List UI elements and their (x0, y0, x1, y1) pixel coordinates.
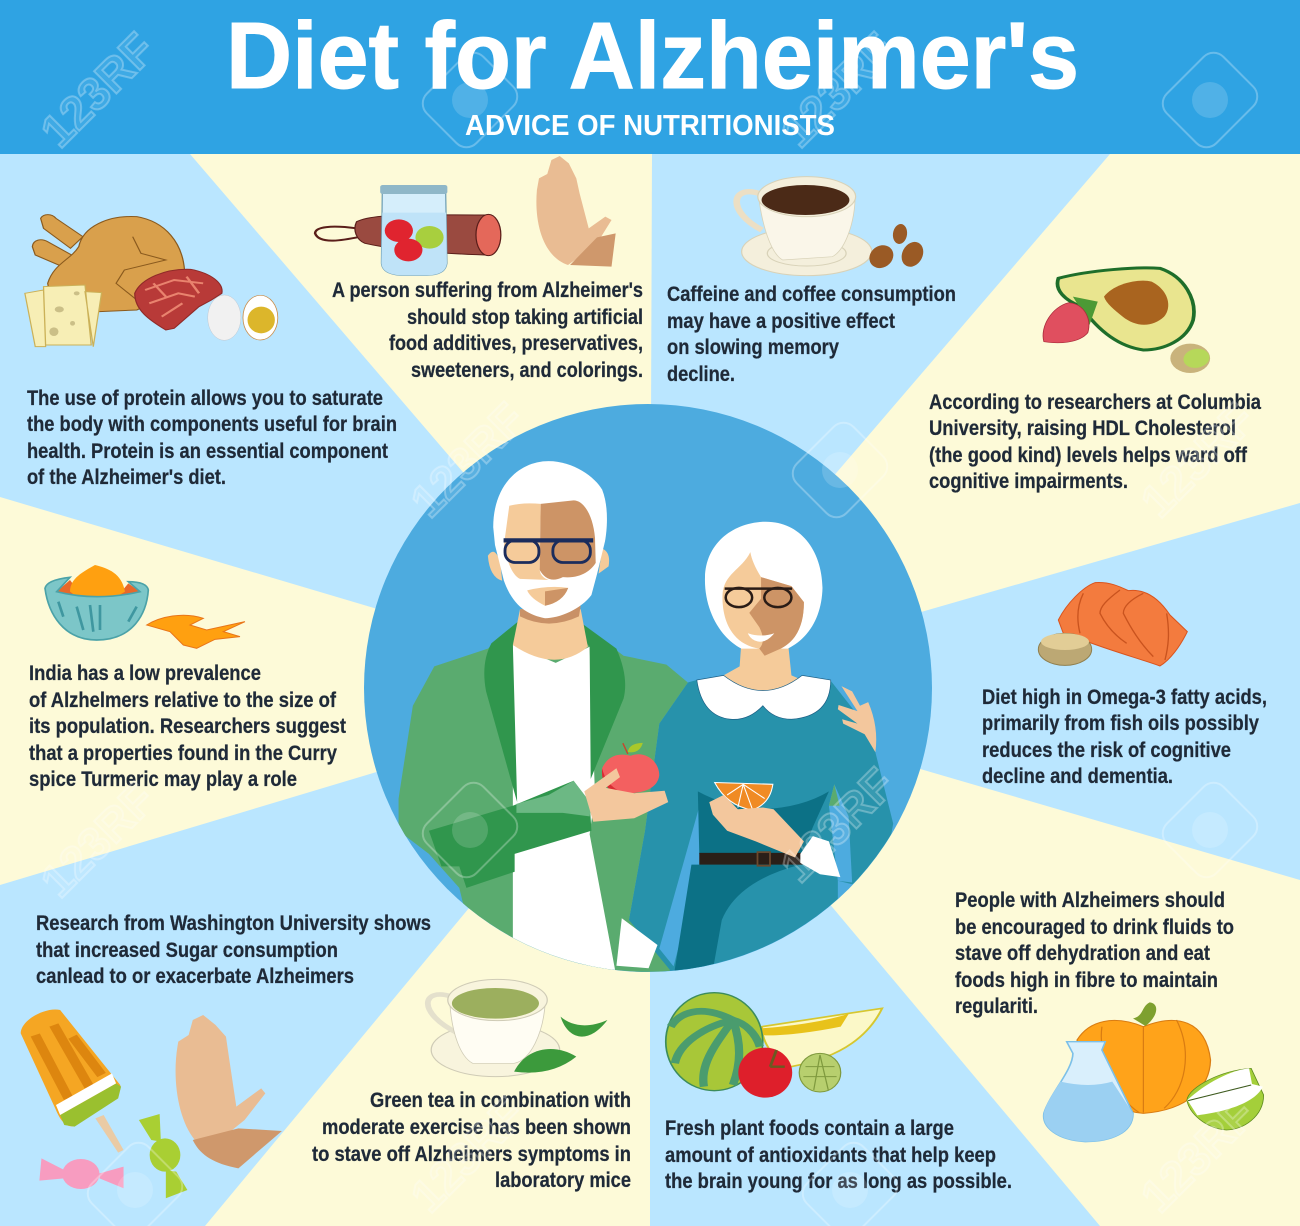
watermarks: 123RF (1130, 393, 1265, 527)
panel: turmeric (29, 565, 346, 791)
watermarks: 123RF (770, 758, 905, 892)
text: protein: the body with components useful for brain (27, 413, 397, 436)
belt (699, 852, 803, 866)
subtitle: ADVICE OF NUTRITIONISTS (465, 110, 835, 142)
watermarks: 123RF (30, 23, 165, 157)
title: Diet for Alzheimer's (226, 3, 1079, 109)
text: HDL cholesterol: cognitive impairments. (929, 470, 1128, 493)
icon: coffee cup and beans (737, 177, 927, 276)
panel: HDL cholesterol (929, 268, 1261, 493)
man's jacket (399, 620, 688, 991)
panel: fluids and fibre (955, 889, 1264, 1142)
panel: omega-3 (982, 583, 1267, 788)
text: omega-3: primarily from fish oils possibly (982, 712, 1259, 735)
text: turmeric: spice Turmeric may play a role (29, 768, 297, 791)
hand on shoulder (838, 686, 876, 752)
orange slice (715, 782, 773, 810)
panel: sugar (21, 912, 431, 1198)
panel: caffeine (667, 177, 956, 386)
icon: pumpkin, flask, apple (1044, 1002, 1264, 1142)
man's hand (584, 768, 668, 822)
icon: watermelon, melon, tomato, artichoke (666, 993, 882, 1098)
text: green tea: moderate exercise has been shown (322, 1116, 631, 1139)
panel: plant foods (665, 993, 1012, 1193)
woman's hand (709, 795, 804, 857)
text: protein (27, 387, 397, 489)
text: turmeric: of Alzhelmers relative to the size of (29, 689, 337, 712)
text: caffeine: on slowing memory (667, 336, 839, 359)
text: protein: of the Alzheimer's diet. (27, 466, 226, 489)
icon: chicken, cheese, meat, eggs (25, 215, 278, 347)
text: fluids and fibre: regulariti. (955, 995, 1038, 1018)
panel: protein (25, 215, 397, 489)
text: turmeric: its population. Researchers suggest (29, 715, 346, 738)
text: green tea: to stave off Alzheimers symptoms in (312, 1143, 631, 1166)
man's head (488, 461, 609, 660)
header band (0, 0, 1300, 154)
text: sugar: Research from Washington University shows (36, 912, 431, 935)
text: caffeine: may have a positive effect (667, 310, 895, 333)
watermarks: 123RF (770, 23, 905, 157)
icon: popsicle, candies, stop hand (21, 1009, 282, 1198)
text: HDL cholesterol: (the good kind) levels helps ward off (929, 444, 1248, 467)
icon: turmeric bowl and root (45, 565, 245, 648)
text: sugar (36, 912, 431, 988)
text: HDL cholesterol (929, 391, 1261, 493)
text: sugar: canlead to or exacerbate Alzheimers (36, 965, 354, 988)
collar (697, 675, 831, 719)
panel: additives (315, 156, 643, 382)
text: caffeine (667, 283, 956, 386)
icon: avocado, strawberry, pistachio (1043, 268, 1213, 373)
icon: salmon and walnut (1038, 583, 1187, 666)
text: caffeine: Caffeine and coffee consumption (667, 283, 956, 306)
text: fluids and fibre: People with Alzheimers should (955, 889, 1225, 912)
text: HDL cholesterol: According to researchers at Columbia (929, 391, 1261, 414)
text: additives: A person suffering from Alzheimer's (332, 279, 643, 302)
woman's glasses (725, 588, 792, 607)
text: fluids and fibre (955, 889, 1234, 1018)
central circle with couple (364, 404, 932, 991)
text: sugar: that increased Sugar consumption (36, 939, 338, 962)
apple (602, 743, 659, 793)
text: fluids and fibre: foods high in fibre to maintain (955, 969, 1218, 992)
text: turmeric: India has a low prevalence (29, 662, 261, 685)
watermarks: 123RF (1130, 1088, 1265, 1222)
panel: green tea (312, 979, 631, 1192)
text: green tea (312, 1089, 631, 1192)
text: fluids and fibre: be encouraged to drink fluids to (955, 916, 1234, 939)
text: omega-3: decline and dementia. (982, 765, 1173, 788)
text: additives (332, 279, 643, 382)
text: plant foods: the brain young for as long as possible. (665, 1170, 1012, 1193)
text: turmeric (29, 662, 346, 791)
woman's head (697, 522, 831, 719)
text: plant foods: Fresh plant foods contain a large (665, 1117, 954, 1140)
text: protein: The use of protein allows you to saturate (27, 387, 383, 410)
watermarks: 123RF (400, 1088, 535, 1222)
icon: green tea cup and leaves (428, 979, 607, 1077)
text: additives: food additives, preservatives, (389, 332, 643, 355)
text: plant foods (665, 1117, 1012, 1193)
text: additives: sweeteners, and colorings. (411, 359, 643, 382)
text: omega-3: Diet high in Omega-3 fatty acids, (982, 686, 1267, 709)
icon: sausage, preserves jar, stop hand (315, 156, 616, 275)
text: plant foods: amount of antioxidants that help keep (665, 1144, 996, 1167)
text: green tea: laboratory mice (495, 1169, 631, 1192)
text: green tea: Green tea in combination with (370, 1089, 631, 1112)
cuffs (616, 836, 840, 968)
woman's dress (629, 680, 893, 991)
text: turmeric: that a properties found in the Curry (29, 742, 337, 765)
text: HDL cholesterol: University, raising HDL Cholesterol (929, 417, 1236, 440)
text: omega-3: reduces the risk of cognitive (982, 739, 1231, 762)
text: additives: should stop taking artificial (407, 306, 643, 329)
text: protein: health. Protein is an essential component (27, 440, 388, 463)
text: omega-3 (982, 686, 1267, 788)
text: fluids and fibre: stave off dehydration and eat (955, 942, 1210, 965)
text: caffeine: decline. (667, 363, 735, 386)
watermarks: 123RF (400, 393, 535, 527)
watermarks: 123RF (30, 773, 165, 907)
man's glasses (504, 540, 593, 562)
